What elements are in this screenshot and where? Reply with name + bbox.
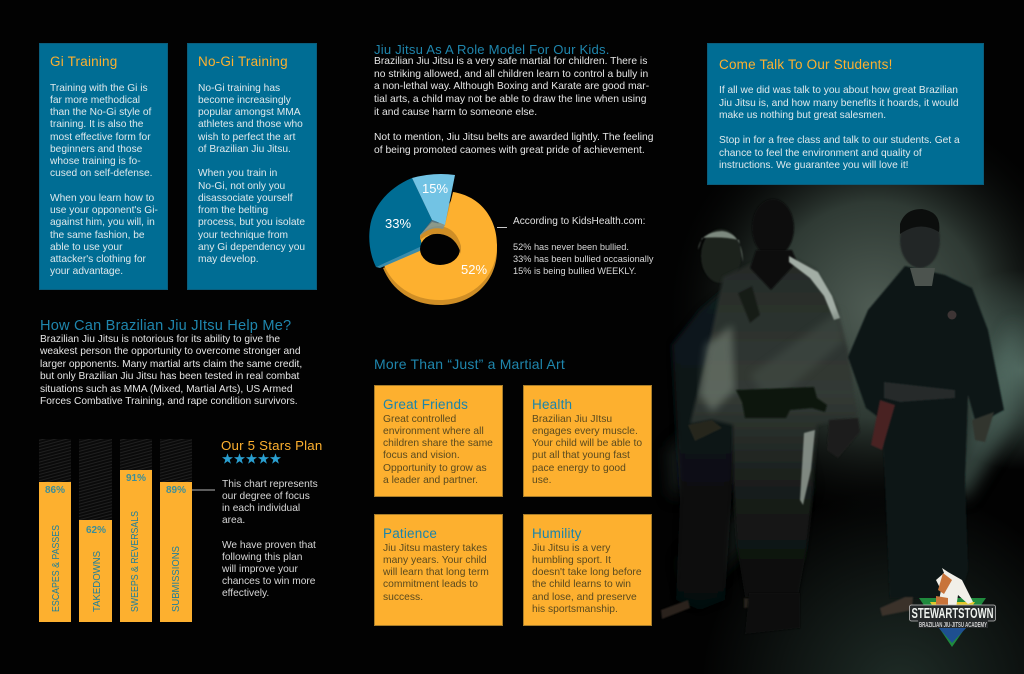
bar: submissions xyxy=(160,439,192,622)
text: students body: make us nothing but great salesmen. xyxy=(719,110,886,121)
text: Gi Training body: cused on self-defense. xyxy=(50,168,153,179)
card text xyxy=(532,414,642,486)
card text: Jiu Jitsu mastery takes xyxy=(383,542,487,554)
text: No-Gi Training body: become increasingly xyxy=(198,95,291,106)
bar: escapes and passes: ESCAPES & PASSES xyxy=(50,525,62,612)
text: students body: Jiu Jitsu is, and how many benefits it hoards, it would xyxy=(719,98,959,108)
text: how BJJ helps xyxy=(40,334,302,407)
text: chart description: This chart represents xyxy=(222,478,318,490)
text: students body: Stop in for a free class and talk to our students. Get a xyxy=(719,135,960,146)
text: Gi Training body: training. It is also the xyxy=(50,119,143,130)
text: No-Gi Training body: No-Gi training has xyxy=(198,82,280,94)
card heading: Patience xyxy=(383,526,437,541)
card text: environment where all xyxy=(383,426,484,437)
text: No-Gi Training body: disassociate yourself xyxy=(198,193,293,204)
text: chart description: following this plan xyxy=(222,552,302,563)
heading: No-Gi Training: No-Gi Training xyxy=(198,54,288,69)
text: how BJJ helps: larger opponents. Many martial arts claim the same credit, xyxy=(40,359,302,370)
text: role model body: tial arts, a child may not be able to draw the line when using xyxy=(374,94,646,105)
slice 52% xyxy=(383,192,497,300)
text: No-Gi Training body: of Brazilian Jiu Jitsu. xyxy=(198,144,291,155)
panel: Come Talk To Our Students xyxy=(707,43,984,185)
logo banner xyxy=(910,605,996,629)
text: No-Gi Training body: may develop. xyxy=(198,254,259,265)
bar: takedowns xyxy=(79,439,112,622)
card text: Jiu Jitsu is a very xyxy=(532,542,610,554)
heading: Come Talk To Our Students: Come Talk To Our Students! xyxy=(719,57,893,72)
text: No-Gi Training body xyxy=(198,82,305,265)
text: KidsHealth source: According to KidsHealth.com: xyxy=(513,216,645,226)
text: role model body: a non-lethal way. Although Boxing and Karate are good mar- xyxy=(374,81,649,92)
slice 33% xyxy=(369,178,432,268)
heading: How Can Brazilian Jiu Jitsu Help Me?: How Can Brazilian Jiu JItsu Help Me? xyxy=(40,318,291,334)
text: Gi Training body: When you learn how to xyxy=(50,193,154,204)
text: role model body: Brazilian Jiu Jitsu is a very safe martial for children. There is xyxy=(374,56,647,67)
card: Humility xyxy=(523,514,652,626)
bar: escapes and passes: 86% xyxy=(45,485,65,496)
text: Gi Training body: Training with the Gi is xyxy=(50,82,148,94)
card text: his sportsmanship. xyxy=(532,604,618,615)
bar: sweeps and reversals: SWEEPS & REVERSALS xyxy=(129,511,141,612)
slice 15% xyxy=(412,174,455,225)
logo triangle xyxy=(919,598,986,647)
text: Gi Training body: most effective form for xyxy=(50,132,151,142)
right student, dark gi xyxy=(848,209,1004,616)
text: how BJJ helps: but only Brazilian Jiu Jitsu has been tested in real combat xyxy=(40,371,299,382)
card text: a leader and partner. xyxy=(383,475,478,486)
card text: many years. Your child xyxy=(383,555,487,566)
text: Gi Training body: than the No-Gi style of xyxy=(50,107,151,118)
text: No-Gi Training body: from the belting xyxy=(198,205,268,216)
card heading: Great Friends xyxy=(383,397,468,412)
text: No-Gi Training body: your technique from xyxy=(198,230,288,240)
text: role model body: no striking allowed, and all children learn to control a bully in xyxy=(374,69,648,80)
text: Gi Training body: able to use your xyxy=(50,242,122,253)
icon: five stars xyxy=(222,454,281,464)
donut hole xyxy=(420,233,460,265)
card text: doesn't take long before xyxy=(532,567,642,578)
slice 15%: 15% xyxy=(422,181,448,196)
text: students body: instructions. We guarantee you will love it! xyxy=(719,160,909,171)
text: Gi Training body xyxy=(50,82,158,277)
card text: success. xyxy=(383,592,423,602)
text: bullying statistics: 15% is being bullied WEEKLY. xyxy=(513,266,636,276)
card text: focus and vision. xyxy=(383,450,460,461)
front student, white gi xyxy=(688,199,860,634)
heading: Our 5 Stars Plan: Our 5 Stars Plan xyxy=(221,438,322,453)
card text: Great controlled xyxy=(383,414,456,424)
card text: humbling sport. It xyxy=(532,555,611,566)
text: bullying statistics: 33% has been bullied occasionally xyxy=(513,254,653,264)
donut chart: bullying statistics xyxy=(369,174,507,305)
card text xyxy=(532,542,642,615)
heading: Gi Training: Gi Training xyxy=(50,54,117,69)
text: chart description: chances to win more xyxy=(222,576,315,587)
card: Patience xyxy=(374,514,503,626)
card text: Opportunity to grow as xyxy=(383,462,487,474)
text: bullying statistics: 52% has never been bullied. xyxy=(513,242,629,252)
bar: escapes and passes xyxy=(39,439,71,622)
text: chart description: in each individual xyxy=(222,503,300,514)
text: bullying statistics xyxy=(513,242,654,276)
card text: the child learns to win xyxy=(532,579,631,590)
text: Gi Training body: whose training is fo- xyxy=(50,156,141,167)
text: students body xyxy=(719,85,960,171)
card text: pace energy to good xyxy=(532,462,626,474)
bar: sweeps and reversals: 91% xyxy=(126,473,146,484)
text: No-Gi Training body: any Gi dependency you xyxy=(198,242,305,253)
text: No-Gi Training body: popular amongst MMA xyxy=(198,107,300,118)
panel: No-Gi Training xyxy=(187,43,317,290)
text: chart description: our degree of focus xyxy=(222,491,310,502)
card text: engages every muscle. xyxy=(532,426,638,437)
bar: submissions: 89% xyxy=(166,485,186,496)
card text: children share the same xyxy=(383,438,493,449)
text: Gi Training body: far more methodical xyxy=(50,95,140,106)
text: chart description xyxy=(222,478,318,599)
bar: submissions: SUBMISSIONS xyxy=(170,546,182,612)
text: No-Gi Training body: When you train in xyxy=(198,168,277,179)
text: role model body: Not to mention, Jiu Jitsu belts are awarded lightly. The feeling xyxy=(374,132,654,143)
text: how BJJ helps: situations such as MMA (Mixed, Martial Arts), US Armed xyxy=(40,384,292,395)
card: Health xyxy=(523,385,652,497)
text: students body: chance to feel the environment and quality of xyxy=(719,148,922,158)
text: Gi Training body: the same fashion, be xyxy=(50,230,145,240)
text: chart description: We have proven that xyxy=(222,540,316,551)
text: chart description: area. xyxy=(222,515,245,526)
text: chart description: will improve your xyxy=(222,564,298,575)
card text: use. xyxy=(532,475,551,486)
text: No-Gi Training body: No-Gi, not only you xyxy=(198,180,285,192)
card text xyxy=(383,542,489,602)
heading: More Than Just a Martial Art: More Than “Just” a Martial Art xyxy=(374,356,565,372)
bar: sweeps and reversals xyxy=(120,439,152,622)
text: Gi Training body: beginners and those xyxy=(50,144,142,155)
card text: commitment leads to xyxy=(383,579,478,590)
bar: takedowns: TAKEDOWNS xyxy=(91,551,103,612)
card text xyxy=(383,414,493,486)
heading: Jiu Jitsu As A Role Model: Jiu Jitsu As A Role Model For Our Kids. xyxy=(374,42,610,57)
card text: Brazilian Jiu JItsu xyxy=(532,414,612,424)
card text: put all that young fast xyxy=(532,450,630,461)
card: Great Friends xyxy=(374,385,503,497)
text: Gi Training body: against him, you will, in xyxy=(50,217,155,228)
text: No-Gi Training body: wish to perfect the art xyxy=(198,132,295,142)
text: Gi Training body: use your opponent's Gi- xyxy=(50,205,158,216)
text: how BJJ helps: Brazilian Jiu Jitsu is notorious for its ability to give the xyxy=(40,334,280,345)
card text: Your child will be able to xyxy=(532,438,642,449)
donut depth xyxy=(383,197,497,305)
card heading: Humility xyxy=(532,526,582,541)
text: role model body: it and cause harm to someone else. xyxy=(374,107,537,118)
card text: and lose, and preserve xyxy=(532,592,637,602)
text: role model body xyxy=(374,56,654,156)
text: chart description: effectively. xyxy=(222,588,269,599)
text: students body: If all we did was talk to you about how great Brazilian xyxy=(719,85,958,96)
card text: will learn that long term xyxy=(383,567,489,578)
text: No-Gi Training body: athletes and those who xyxy=(198,119,303,130)
slice 52%: 52% xyxy=(461,262,487,277)
bar: takedowns: 62% xyxy=(86,525,106,536)
rear student, left xyxy=(661,229,764,619)
text: Gi Training body: your advantage. xyxy=(50,266,123,277)
logo: Stewartstown Brazilian Jiu-Jitsu Academy xyxy=(909,568,996,647)
slice 33%: 33% xyxy=(385,216,411,231)
text: role model body: of being promoted caomes with great pride of achievement. xyxy=(374,145,645,156)
text: No-Gi Training body: process, but you isolate xyxy=(198,217,305,228)
card heading: Health xyxy=(532,397,572,412)
panel: Gi Training xyxy=(39,43,168,290)
text: how BJJ helps: Forces Combative Training, and rape condition survivors. xyxy=(40,396,298,407)
text: Gi Training body: attacker's clothing for xyxy=(50,254,146,265)
bar chart: degree of focus xyxy=(39,439,215,622)
logo fighters xyxy=(936,568,973,608)
text: how BJJ helps: weakest person the opportunity to overcome stronger and xyxy=(40,346,300,357)
